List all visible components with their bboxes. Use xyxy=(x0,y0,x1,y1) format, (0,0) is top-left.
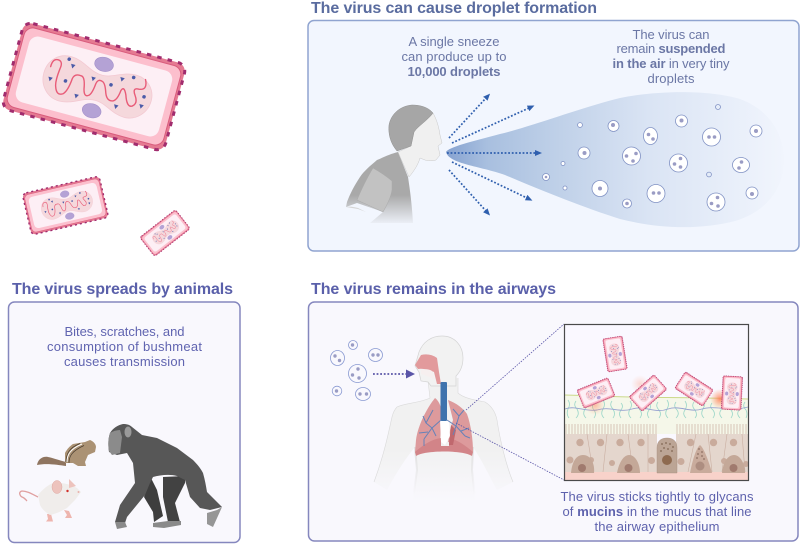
person sneezing xyxy=(346,105,442,223)
large bacterium xyxy=(1,21,187,152)
text: suspended in the air: remain suspended xyxy=(616,41,726,56)
text: transmission xyxy=(47,324,202,369)
text: transmission: Bites, scratches, and xyxy=(64,324,184,339)
heading: airways: The virus remains in the airways xyxy=(311,281,556,298)
mucin strands xyxy=(567,400,747,418)
text: transmission: consumption of bushmeat xyxy=(47,339,202,354)
text: suspended in the air xyxy=(612,27,730,86)
text: suspended in the air: The virus can xyxy=(632,27,710,42)
bronchi xyxy=(419,409,470,446)
droplets xyxy=(542,104,762,211)
dotted arrows xyxy=(447,98,536,211)
droplet virus particles xyxy=(545,118,758,208)
text: sneeze droplets xyxy=(402,34,506,79)
panel: droplet formation xyxy=(308,20,799,251)
text: suspended in the air: droplets xyxy=(648,71,695,86)
text: mucins: the airway epithelium xyxy=(594,519,720,534)
binding glows xyxy=(585,375,730,415)
heading: droplet formation: The virus can cause droplet formation xyxy=(311,0,597,17)
text: transmission: causes transmission xyxy=(64,354,185,369)
epithelial cells xyxy=(565,434,748,472)
text: sneeze droplets: A single sneeze xyxy=(408,34,500,49)
respiratory tract xyxy=(415,354,441,384)
goblet cell xyxy=(657,438,677,473)
text: sneeze droplets: 10,000 droplets xyxy=(408,64,500,79)
mouse xyxy=(20,479,81,522)
flask cell xyxy=(690,445,712,473)
text: mucins: The virus sticks tightly to glycans xyxy=(560,489,754,504)
small bacterium xyxy=(140,209,190,257)
text: sneeze droplets: can produce up to xyxy=(402,49,506,64)
heading: animals: The virus spreads by animals xyxy=(12,281,233,298)
medium bacterium xyxy=(22,176,109,235)
zoom guide lines xyxy=(456,324,564,480)
arrow to nose xyxy=(373,370,415,378)
inhaled droplets xyxy=(330,340,382,400)
lungs xyxy=(415,398,473,456)
text: suspended in the air: in the air in very tiny xyxy=(612,56,730,71)
trachea xyxy=(440,382,447,421)
panel: airways xyxy=(308,302,798,541)
chipmunk xyxy=(37,440,96,466)
text: mucins: of mucins in the mucus that line xyxy=(562,504,752,519)
droplet cloud xyxy=(446,92,784,227)
basal cells xyxy=(571,455,745,473)
chimpanzee xyxy=(108,424,222,529)
text: mucins xyxy=(560,489,754,534)
human torso xyxy=(374,336,513,500)
inset: airway epithelium xyxy=(564,324,749,480)
cilia xyxy=(566,424,746,434)
mucus layer xyxy=(565,395,748,434)
viruses on mucus xyxy=(577,336,743,412)
panel: animals xyxy=(8,302,240,542)
basement membrane xyxy=(565,472,748,480)
